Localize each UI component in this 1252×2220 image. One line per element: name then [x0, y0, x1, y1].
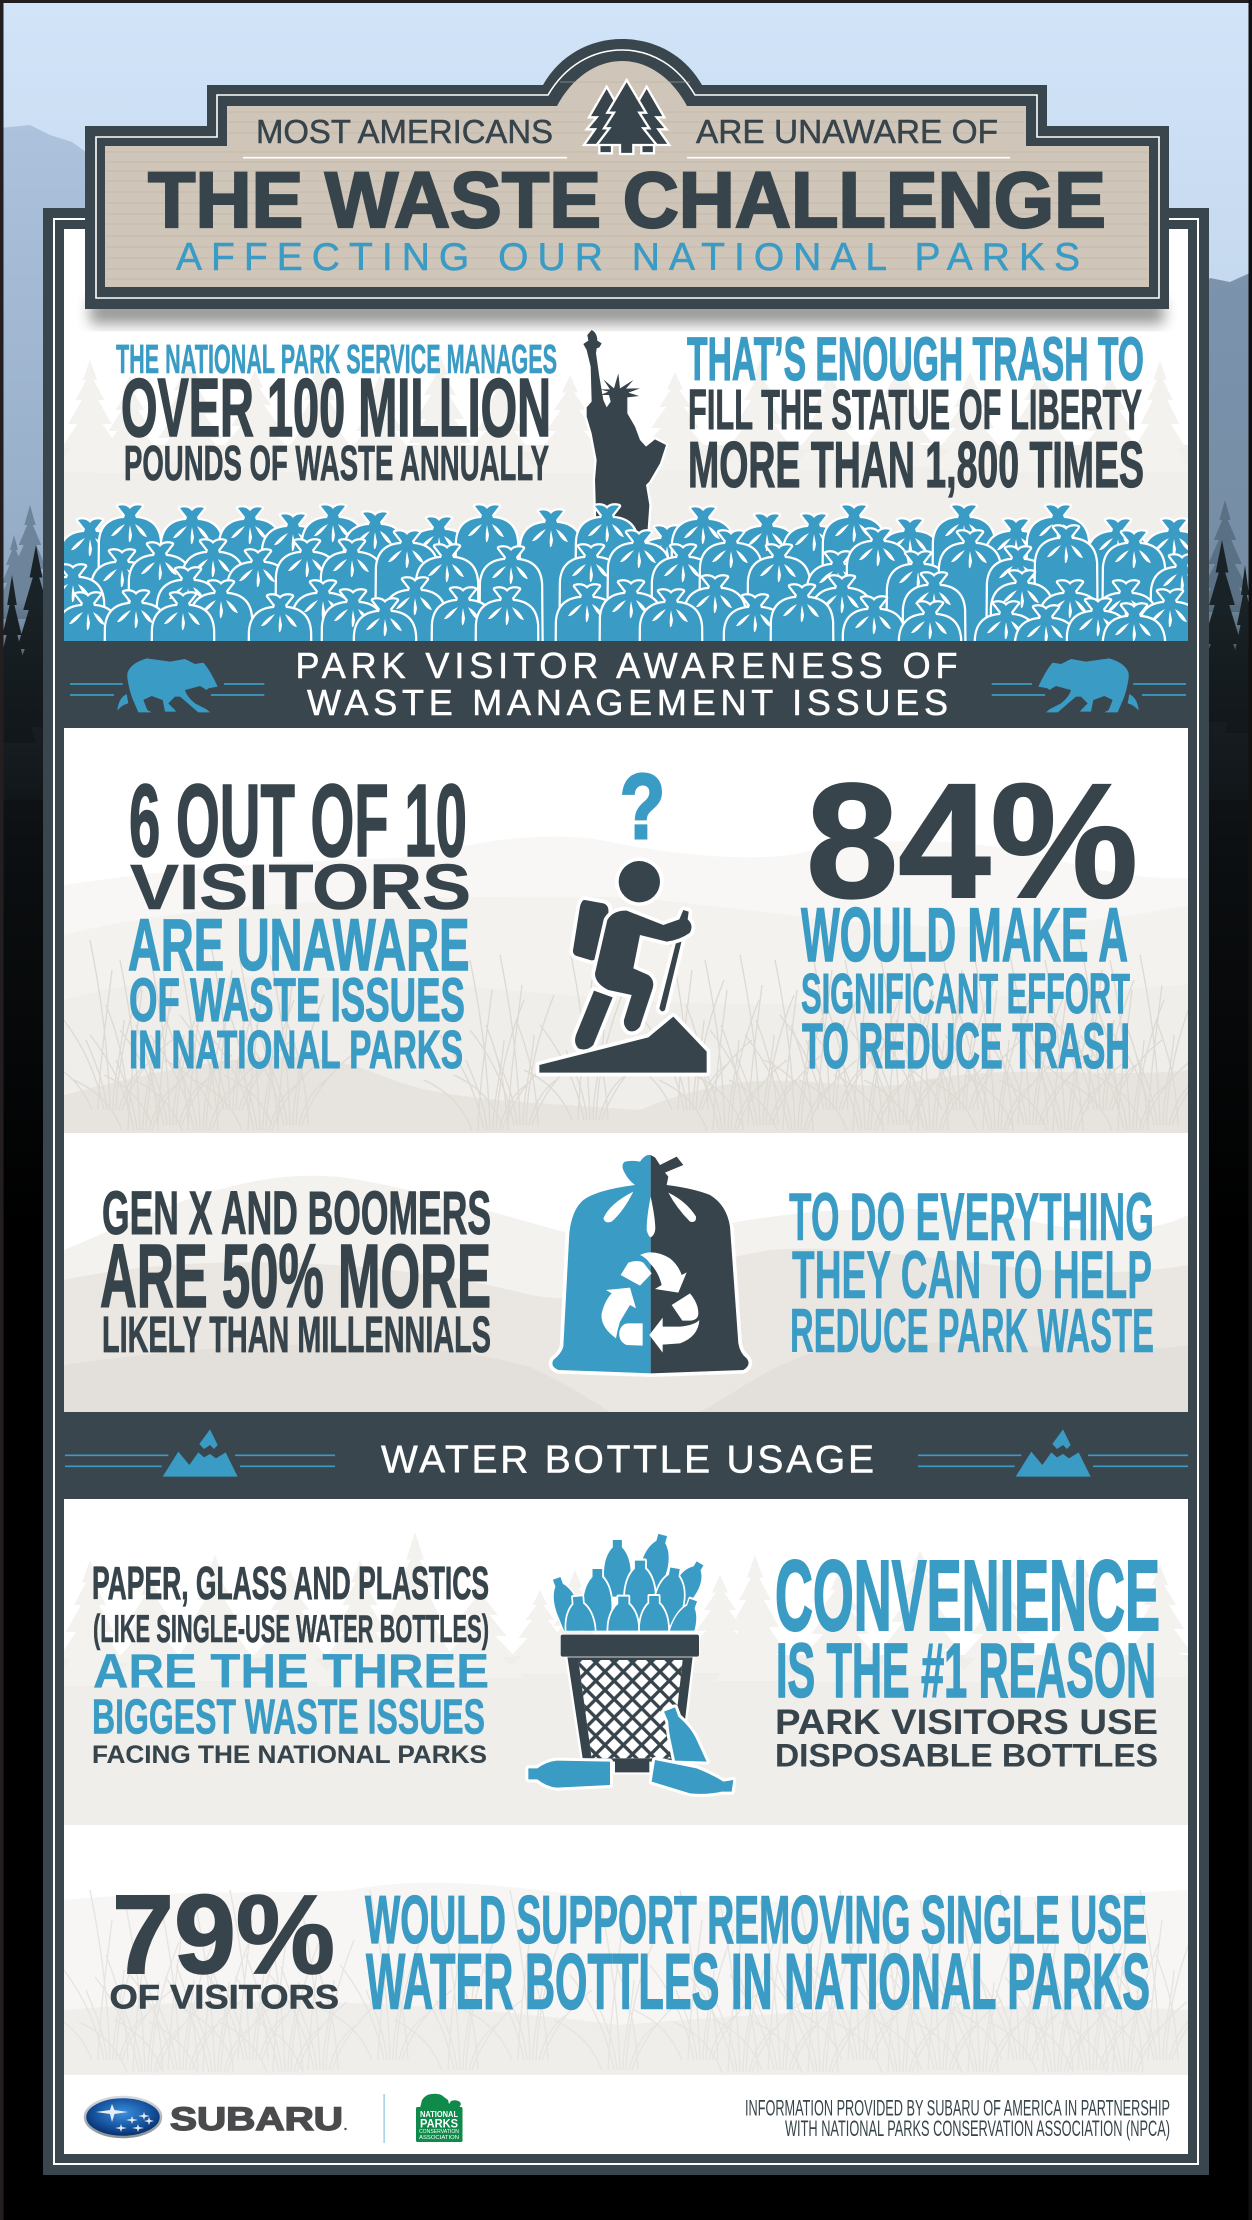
footer — [64, 2075, 1188, 2154]
text: three biggest waste issues: ARE THE THREE — [93, 1646, 489, 1699]
text: three biggest waste issues: PAPER, GLASS AND PLASTICS — [92, 1557, 489, 1609]
divider between logos — [384, 2094, 385, 2143]
title sign — [85, 39, 1169, 324]
panel: trash scale statistic — [64, 330, 1188, 641]
text: statue of liberty comparison — [687, 325, 1144, 501]
text: convenience reason — [775, 1540, 1160, 1774]
text: convenience reason: DISPOSABLE BOTTLES — [775, 1738, 1158, 1774]
icon: mountain right — [918, 1429, 1188, 1477]
text: gen x and boomers: GEN X AND BOOMERS — [102, 1179, 491, 1247]
text: national park service waste: POUNDS OF WASTE ANNUALLY — [124, 437, 549, 491]
text: gen x and boomers — [100, 1179, 491, 1363]
heading: park visitor awareness: PARK VISITOR AWARENESS OF — [296, 645, 958, 686]
panel: generations comparison — [64, 1133, 1188, 1412]
text: gen x and boomers: ARE 50% MORE — [100, 1227, 491, 1327]
text: 6 out of 10 visitors — [128, 763, 471, 1080]
text: three biggest waste issues: FACING THE NATIONAL PARKS — [92, 1742, 487, 1769]
text: gen x and boomers: LIKELY THAN MILLENNIALS — [102, 1306, 491, 1363]
icon: hiker climbing — [539, 861, 707, 1073]
text: three biggest waste issues: (LIKE SINGLE-USE WATER BOTTLES) — [93, 1608, 489, 1651]
sign subtitle: AFFECTING OUR NATIONAL PARKS — [176, 236, 1080, 279]
text: would support removing bottles — [365, 1882, 1150, 2026]
text: 79 percent of visitors: 79% — [112, 1872, 335, 1997]
section band: water bottle usage — [64, 1412, 1188, 1499]
heading: park visitor awareness: WASTE MANAGEMENT ISSUES — [307, 682, 948, 723]
panel: waste materials and convenience — [64, 1533, 1188, 1825]
logo: national parks conservation association: ASSOCIATION — [419, 2135, 459, 2141]
text: 6 out of 10 visitors: VISITORS — [130, 851, 471, 923]
logo: national parks conservation association: NATIONAL — [420, 2109, 458, 2119]
heading: water bottle usage: WATER BOTTLE USAGE — [381, 1439, 874, 1482]
text: 6 out of 10 visitors: ARE UNAWARE — [128, 905, 470, 986]
panel: support for removing bottles — [64, 1883, 1188, 2075]
text: do everything they can — [789, 1179, 1154, 1366]
text: 6 out of 10 visitors: IN NATIONAL PARKS — [129, 1020, 463, 1080]
text: convenience reason: PARK VISITORS USE — [775, 1703, 1158, 1742]
logo: national parks conservation association — [416, 2094, 462, 2142]
icon: question mark: ? — [620, 756, 665, 858]
text: national park service waste — [116, 336, 557, 491]
text: 84 percent effort — [801, 749, 1138, 1082]
logo: subaru wordmark: SUBARU — [170, 2101, 343, 2137]
text: 84 percent effort: 84% — [806, 749, 1138, 932]
text: three biggest waste issues — [92, 1557, 489, 1769]
text: three biggest waste issues: BIGGEST WASTE ISSUES — [92, 1689, 485, 1744]
fallen bottles — [528, 1707, 733, 1794]
icon: statue of liberty — [583, 330, 666, 533]
text: 6 out of 10 visitors: OF WASTE ISSUES — [129, 966, 465, 1034]
text: 6 out of 10 visitors: 6 OUT OF 10 — [129, 763, 467, 878]
logo: national parks conservation association: CONSERVATION — [419, 2129, 459, 2135]
icon: mountain left — [65, 1429, 335, 1477]
icon: three pine trees — [584, 80, 669, 154]
illustration: pile of trash bags — [64, 503, 1188, 641]
source credit — [745, 2096, 1170, 2141]
registered mark dot — [344, 2128, 347, 2130]
logo: national parks conservation association: PARKS — [420, 2118, 458, 2130]
icon: bear right — [992, 658, 1186, 712]
text: national park service waste: OVER 100 MILLION — [121, 361, 551, 454]
bottles in bin — [546, 1532, 710, 1657]
panel: visitor awareness — [64, 772, 1188, 1133]
sign title: THE WASTE CHALLENGE — [148, 156, 1106, 244]
icon: overflowing bottle bin — [528, 1532, 733, 1794]
divider lines beneath sign text — [243, 157, 1010, 159]
sign text: most americans: MOST AMERICANS — [256, 114, 553, 151]
heading: park visitor awareness — [296, 645, 958, 723]
text: 79 percent of visitors: OF VISITORS — [110, 1978, 339, 2016]
section band: park visitor awareness — [64, 641, 1188, 728]
text: national park service waste: THE NATIONAL PARK SERVICE MANAGES — [116, 336, 557, 382]
icon: recycling trash bag — [552, 1155, 749, 1373]
icon: bear left — [70, 658, 264, 712]
logo: subaru emblem — [85, 2097, 161, 2137]
sign text: are unaware of: ARE UNAWARE OF — [696, 114, 998, 151]
